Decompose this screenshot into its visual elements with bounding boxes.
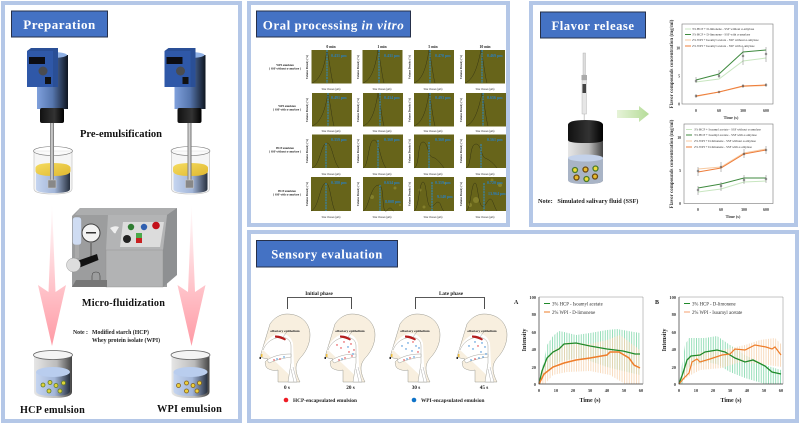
arrow: right to WPI emulsion: [178, 203, 206, 346]
row labels: [269, 63, 301, 196]
chart grid: droplet size distributions: Volume Density (%): [408, 139, 412, 163]
line chart A: intensity over time: 50: [622, 388, 627, 393]
line chart B: intensity over time: 40: [672, 347, 677, 352]
chart grid: droplet size distributions: Volume Density (%): [408, 98, 412, 122]
chart grid: droplet size distributions: 9.140 µm: [437, 194, 453, 199]
line chart: bottom flavor release: 10: [677, 136, 681, 140]
chart grid: droplet size distributions: Volume Density (%): [357, 139, 360, 163]
line chart: bottom flavor release: 3% HCP + Isoamyl acetate - SSF with α-amylase: [694, 133, 757, 137]
chart grid: droplet size distributions: 0.720 µm: [487, 180, 503, 185]
panel: flavor release: [531, 3, 796, 225]
line chart A: intensity over time: 40: [532, 347, 537, 352]
label: pre-emulsification: Pre-emulsification: [80, 129, 162, 140]
chart grid: droplet size distributions: 0.431 µm: [331, 53, 347, 58]
chart grid: droplet size distributions: Volume Density (%): [306, 182, 309, 206]
chart grid: droplet size distributions: Volume Density (%): [460, 139, 463, 163]
column headers: 10 min: [479, 45, 491, 49]
chart grid: droplet size distributions: Size Classes (µm): [476, 88, 495, 91]
line chart: bottom flavor release: 0: [697, 208, 699, 212]
label: HCP emulsion: HCP emulsion: [20, 405, 85, 416]
chart grid: droplet size distributions: Volume Density (%): [306, 98, 309, 122]
chart grid: droplet size distributions: Volume Density (%): [460, 98, 463, 122]
icon: WPI emulsion beaker: [171, 350, 210, 398]
heading: Preparation: Preparation: [23, 17, 96, 32]
chart grid: droplet size distributions: Volume Density (%): [306, 55, 309, 79]
line chart: top flavor release: [670, 19, 773, 120]
bracket: initial phase: Initial phase: [305, 291, 333, 297]
chart grid: droplet size distributions: Volume Density (%): [306, 139, 309, 163]
line chart: top flavor release: 300: [740, 109, 746, 113]
line chart A: intensity over time: 2% WPI - D-limonene: [552, 311, 595, 316]
row labels: ( SSF without α-amylase ): [269, 66, 301, 70]
line chart B: intensity over time: 30: [728, 388, 733, 393]
line chart A: intensity over time: 60: [639, 388, 644, 393]
line chart: top flavor release: 60: [717, 109, 721, 113]
legend: emulsions: WPI-encapsulated emulsion: [421, 398, 484, 404]
line chart: top flavor release: 2% WPI + Isoamyl acetate - SSF without α-amylase: [692, 38, 759, 42]
time labels: 20 s: [346, 385, 355, 391]
row labels: HCP emulsion: [276, 146, 294, 150]
line chart A: intensity over time: [514, 295, 644, 404]
chart grid: droplet size distributions: Volume Density (%): [357, 55, 360, 79]
row labels: ( SSF with α-amylase ): [273, 192, 301, 196]
arrow: release: [617, 106, 649, 122]
line chart A: intensity over time: 30: [588, 388, 593, 393]
chart grid: droplet size distributions: Size Classes (µm): [322, 216, 341, 219]
line chart B: intensity over time: 50: [762, 388, 767, 393]
chart grid: droplet size distributions: Size Classes (µm): [424, 173, 443, 176]
line chart: top flavor release: Flavor compounds concentration (mg/ml): [670, 19, 675, 108]
time labels: 0 s: [284, 385, 290, 391]
line chart A: intensity over time: Intensity: [522, 329, 528, 351]
row labels: ( SSF without α-amylase ): [269, 150, 301, 154]
line chart B: intensity over time: 10: [694, 388, 699, 393]
line chart: bottom flavor release: 3% HCP + Isoamyl acetate - SSF without α-amylase: [694, 128, 761, 132]
chart grid: droplet size distributions: 0.359 µm: [331, 137, 347, 142]
time labels: 30 s: [412, 385, 420, 391]
chart grid: droplet size distributions: 0.359 µm: [435, 180, 451, 185]
line chart: bottom flavor release: Flavor compounds concentration (mg/ml): [670, 119, 675, 208]
chart grid: droplet size distributions: Volume Density (%): [408, 55, 412, 79]
line chart A: intensity over time: A: [514, 300, 519, 306]
line chart B: intensity over time: 80: [672, 312, 677, 317]
line chart A: intensity over time: 20: [532, 365, 537, 370]
chart grid: droplet size distributions: Size Classes (µm): [424, 88, 443, 91]
line chart A: intensity over time: 20: [571, 388, 576, 393]
bracket: initial phase: [288, 291, 352, 309]
illustration: head at 0 s: [260, 314, 310, 382]
line chart A: intensity over time: Time (s): [579, 397, 601, 404]
column headers: 1 min: [377, 45, 387, 49]
panel: preparation: [3, 3, 240, 421]
note: materials: [73, 329, 160, 344]
chart grid: droplet size distributions: Size Classes (µm): [322, 88, 341, 91]
chart grid: droplet size distributions: Volume Density (%): [408, 182, 412, 206]
row labels: ( SSF with α-amylase ): [273, 108, 301, 112]
label: micro-fluidization: Micro-fluidization: [82, 298, 165, 309]
time labels: 45 s: [480, 385, 488, 391]
chart grid: droplet size distributions: Size Classes (µm): [373, 130, 392, 133]
chart grid: droplet size distributions: Size Classes (µm): [322, 130, 341, 133]
note: materials: Modified starch (HCP): [92, 329, 149, 336]
line chart B: intensity over time: 0: [674, 382, 677, 387]
chart grid: droplet size distributions: Size Classes (µm): [476, 216, 495, 219]
chart grid: droplet size distributions: 0.470 µm: [435, 53, 451, 58]
chart grid: droplet size distributions: 0.360 µm: [435, 137, 451, 142]
heading: Flavor release: Flavor release: [552, 19, 634, 33]
chart grid: droplet size distributions: 0.656 µm: [487, 95, 503, 100]
line chart B: intensity over time: 60: [779, 388, 784, 393]
chart grid: droplet size distributions: Volume Density (%): [460, 55, 463, 79]
illustration: head at 0 s: olfactory epithelium: [270, 329, 300, 333]
heading: Oral processing in vitro: Oral processing in vitro: [263, 18, 404, 32]
line chart: bottom flavor release: 600: [763, 208, 769, 212]
line chart: bottom flavor release: 300: [741, 208, 747, 212]
icon: microfluidizer machine: [66, 208, 177, 287]
row labels: WPI emulsion: [278, 104, 296, 108]
heading: Sensory evaluation: Sensory evaluation: [271, 248, 383, 262]
icon: syringe: [582, 53, 587, 120]
line chart B: intensity over time: 20: [672, 365, 677, 370]
chart grid: droplet size distributions: Size Classes (µm): [322, 173, 341, 176]
chart grid: droplet size distributions: 0.360 µm: [384, 137, 400, 142]
chart grid: droplet size distributions: 0.469 µm: [487, 53, 503, 58]
label: WPI emulsion: WPI emulsion: [157, 404, 222, 415]
illustration: head at 30 s: olfactory epithelium: [400, 329, 430, 333]
column headers: [326, 45, 491, 49]
line chart: top flavor release: 600: [763, 109, 769, 113]
line chart: top flavor release: 3% HCP + D-limonene - SSF with α-amylase: [692, 32, 751, 36]
line chart: top flavor release: Time (s): [724, 115, 739, 120]
chart grid: droplet size distributions: Volume Density (%): [357, 98, 360, 122]
line chart A: intensity over time: 100: [529, 295, 537, 300]
line chart: bottom flavor release: 60: [719, 208, 723, 212]
line chart A: intensity over time: 10: [554, 388, 559, 393]
line chart A: intensity over time: 60: [532, 330, 537, 335]
chart grid: droplet size distributions: 0.634 µm: [384, 180, 400, 185]
chart grid: droplet size distributions: 13.964 µm: [488, 191, 506, 196]
chart grid: droplet size distributions: 8.008 µm: [385, 199, 401, 204]
line chart B: intensity over time: Time (s): [720, 397, 742, 404]
icon: HCP emulsion beaker: [34, 350, 72, 398]
heading: Sensory evaluation: [256, 240, 398, 267]
chart grid: droplet size distributions: Size Classes (µm): [424, 130, 443, 133]
line chart B: intensity over time: 0: [678, 388, 681, 393]
arrow: left to HCP emulsion: [38, 203, 66, 346]
line chart B: intensity over time: 20: [711, 388, 716, 393]
chart grid: droplet size distributions: 0.491 µm: [331, 95, 347, 100]
line chart A: intensity over time: 40: [605, 388, 610, 393]
legend: emulsions: HCP-encapsulated emulsion: [293, 398, 357, 404]
note: materials: Note :: [73, 330, 88, 336]
line chart: bottom flavor release: 2% WPI + D-limonene - SSF with α-amylase: [694, 145, 752, 149]
line chart: bottom flavor release: 2% WPI + D-limonene - SSF without α-amylase: [694, 139, 757, 143]
row labels: WPI emulsion: [276, 63, 294, 67]
illustration: head at 20 s: [324, 314, 375, 382]
line chart: top flavor release: 5: [678, 74, 680, 78]
heading: Oral processing in vitro: [256, 11, 410, 37]
line chart: bottom flavor release: 0: [679, 202, 681, 206]
line chart: top flavor release: 10: [676, 46, 680, 50]
chart grid: droplet size distributions: [306, 50, 506, 219]
line chart B: intensity over time: 3% HCP - D-limonene: [692, 302, 736, 308]
line chart: top flavor release: 2% WPI + Isoamyl acetate - SSF with α-amylase: [692, 44, 755, 48]
bracket: late phase: [416, 291, 484, 309]
panel: oral processing in vitro: [249, 3, 508, 225]
line chart B: intensity over time: 100: [669, 295, 677, 300]
line chart B: intensity over time: 60: [672, 330, 677, 335]
line chart: bottom flavor release: 5: [679, 169, 681, 173]
chart grid: droplet size distributions: Size Classes (µm): [373, 173, 392, 176]
line chart B: intensity over time: Intensity: [662, 329, 668, 351]
chart grid: droplet size distributions: Volume Density (%): [460, 182, 463, 206]
column headers: 5 min: [428, 45, 438, 49]
icon: left homogenizer: [27, 48, 72, 194]
line chart A: intensity over time: 0: [538, 388, 541, 393]
heading: Flavor release: [540, 12, 646, 38]
chart grid: droplet size distributions: 0.493 µm: [435, 95, 451, 100]
note: simulated salivary fluid: Note: Simulated salivary fluid (SSF): [538, 198, 638, 205]
line chart: bottom flavor release: Time (s): [726, 214, 741, 219]
line chart A: intensity over time: 0: [534, 382, 537, 387]
illustration: head at 20 s: olfactory epithelium: [335, 329, 365, 333]
bracket: late phase: Late phase: [439, 291, 464, 297]
line chart A: intensity over time: 3% HCP - Isoamyl acetate: [552, 302, 603, 308]
line chart A: intensity over time: 80: [532, 312, 537, 317]
panel: sensory evaluation: [249, 232, 797, 421]
line chart B: intensity over time: B: [655, 300, 659, 306]
illustration: head at 45 s: olfactory epithelium: [467, 329, 497, 333]
note: materials: Whey protein isolate (WPI): [92, 337, 160, 344]
chart grid: droplet size distributions: Size Classes (µm): [373, 216, 392, 219]
chart grid: droplet size distributions: 0.434 µm: [384, 95, 400, 100]
legend: emulsions: [284, 398, 484, 404]
chart grid: droplet size distributions: 0.380 µm: [331, 180, 347, 185]
line chart: top flavor release: 0: [678, 102, 680, 106]
chart grid: droplet size distributions: Size Classes (µm): [424, 216, 443, 219]
chart grid: droplet size distributions: Volume Density (%): [357, 182, 360, 206]
line chart: top flavor release: 0: [695, 109, 697, 113]
line chart B: intensity over time: [655, 295, 784, 404]
line chart: top flavor release: 3% HCP + D-limonene - SSF without α-amylase: [692, 27, 755, 31]
line chart B: intensity over time: 40: [745, 388, 750, 393]
row labels: HCP emulsion: [278, 189, 296, 193]
column headers: 0 min: [326, 45, 336, 49]
line chart B: intensity over time: 2% WPI - Isoamyl acetate: [692, 311, 742, 316]
time labels: [284, 385, 488, 391]
chart grid: droplet size distributions: Size Classes (µm): [476, 173, 495, 176]
icon: vial with simulated saliva: [568, 120, 603, 184]
chart grid: droplet size distributions: Size Classes (µm): [476, 130, 495, 133]
chart grid: droplet size distributions: 0.561 µm: [487, 137, 503, 142]
chart grid: droplet size distributions: Size Classes (µm): [373, 88, 392, 91]
heading: Preparation: [12, 11, 108, 37]
illustration: head at 45 s: [456, 314, 507, 382]
icon: right homogenizer: [164, 48, 210, 194]
chart grid: droplet size distributions: 0.431 µm: [384, 53, 400, 58]
illustration: head at 30 s: [390, 314, 440, 382]
line chart: bottom flavor release: [670, 119, 773, 219]
